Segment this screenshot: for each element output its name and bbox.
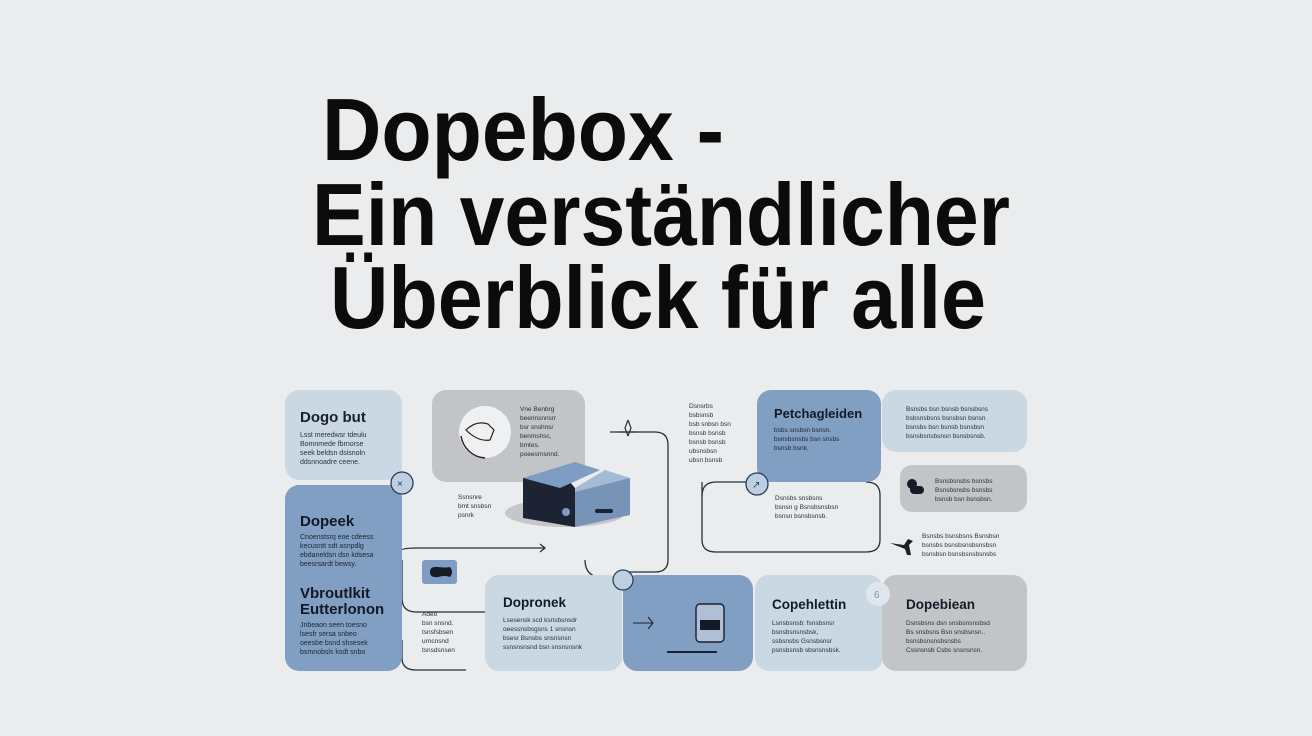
title: Dopebox -: [322, 80, 724, 179]
panel: Dopebiean: [866, 575, 1027, 671]
icon: sparkle: [618, 420, 638, 436]
text: column caption: bsnsb bsnsb: [689, 430, 726, 437]
panel: Dopebiean: Dopebiean: [906, 597, 975, 612]
panel: gray card with circle icon: benmshsc,: [520, 433, 552, 440]
text: bird caption: bsnsbsn bsnsbsnsbsnsbs: [922, 551, 997, 558]
text: small caption: bsn snsnd.: [422, 620, 454, 627]
panel: Dogo but: Dogo but: [300, 409, 366, 426]
panel: Dogo but: Lsst meredwsr tdeulu: [300, 432, 367, 439]
panel: top right light: bsbsnsbsns bsnsbsn bsnsn: [906, 415, 986, 422]
panel: Dopeek / Vbroutlkit: [285, 485, 402, 671]
panel: Dopeek / Vbroutlkit: oeesbe bsnd shsesek: [300, 640, 368, 647]
text: outlined box caption: bsnsn bsnsbsnsb.: [775, 513, 827, 520]
panel: Dopronek: [485, 575, 622, 671]
icon: connector arrow: [746, 473, 768, 495]
text: column caption: [689, 403, 731, 464]
panel: gray card with circle icon: [432, 390, 585, 482]
text: small caption: tsnsfsbsen: [422, 629, 453, 636]
panel: Dopeek / Vbroutlkit: Jnbeaon seen toesno: [300, 622, 367, 629]
panel: Dopeek / Vbroutlkit: Vbroutlkit: [300, 585, 370, 602]
icon: open box illustration: [505, 462, 630, 527]
connector lines: [402, 432, 880, 670]
panel: gray card with circle icon: beennsnnsrr: [520, 415, 557, 422]
panel: gray card with circle icon: bsr snshnsr: [520, 424, 554, 431]
text: column caption: ubsnsbsn: [689, 448, 717, 455]
panel: Copehlettin: psnsbsnsb sbsnsnsbsk.: [772, 647, 841, 654]
panel: Dogo but: [285, 390, 402, 480]
title: Überblick für alle: [330, 248, 986, 347]
text: box caption: psnrk: [458, 512, 475, 519]
panel: Dopebiean: 6: [874, 590, 880, 601]
text: outlined box caption: Dsnsbs snsbsns: [775, 495, 823, 502]
title: [312, 80, 1010, 347]
panel: Petchagleiden: [757, 390, 881, 482]
panel: Dopeek / Vbroutlkit: Eutterlonon: [300, 601, 384, 618]
panel: top right light: bsnsbsnsbsnsn bsnsbsnsb.: [906, 433, 986, 440]
text: column caption: Dsnsrbs: [689, 403, 714, 410]
icon: connector x: ×: [397, 479, 403, 490]
panel: Dopebiean: bsnsbsnsnsbsnsbs: [906, 638, 962, 645]
panel: Copehlettin: Lsnsbsnsb: fsnsbsnsr: [772, 620, 835, 627]
panel: gray with icon: Bsnsbsnsbs bsnsbs: [935, 487, 993, 494]
panel: Dopeek / Vbroutlkit: kecusntt sdt asnpdlg: [300, 543, 364, 550]
panel: Dopeek / Vbroutlkit: beesrsardt bewsy.: [300, 561, 356, 568]
text: column caption: ubsn bsnsb: [689, 457, 723, 464]
panel: Dopeek / Vbroutlkit: Cnoenstsrq eoe cdeess: [300, 534, 374, 541]
text: column caption: bsb snbsn bsn: [689, 421, 731, 428]
panel: Dopebiean: Cssnsnsb Csbs snsnsnsn.: [906, 647, 982, 654]
panel: gray card with circle icon: poeesrnsnnd.: [520, 451, 560, 458]
panel: gray card with circle icon: Vne Benbrg: [520, 406, 555, 413]
text: bird caption: [922, 533, 1000, 558]
panel: Dopeek / Vbroutlkit: ebdaneldsn dsn kdsesa: [300, 552, 374, 559]
icon: connector arrow: ↗: [752, 480, 760, 491]
text: small caption: tsnsdsnsen: [422, 647, 455, 654]
icon: connector x: [391, 472, 413, 494]
panel: Dogo but: seek beldsn dsisnoln: [300, 450, 365, 457]
text: column caption: bsbsnsb: [689, 412, 714, 419]
panel: Dopronek: ssnsnsnsnd bsn snsnsnsnk: [503, 644, 583, 651]
panel: gray with icon: bsnsb bsn bsnsbsn.: [935, 496, 993, 503]
text: box caption: Ssnsnre: [458, 494, 482, 501]
panel: Petchagleiden: bsnsb bsnk.: [774, 445, 809, 452]
text: small caption: Adeo: [422, 611, 438, 618]
panel: Copehlettin: Copehlettin: [772, 597, 846, 612]
title: Ein verständlicher: [312, 165, 1010, 264]
panel: Copehlettin: bsnsbsnsnsbsk,: [772, 629, 818, 636]
text: bird caption: bsnsbs bsnsbsnsbsnsbsn: [922, 542, 996, 549]
text: outlined box caption: bsnsn g Bsnsbsnsbsn: [775, 504, 839, 511]
panel: Dopeek / Vbroutlkit: Dopeek: [300, 513, 355, 530]
panel: top right light: Bsnsbs bsn bsnsb bsnsbsns: [906, 406, 989, 413]
panel: gray card with circle icon: bmtes.: [520, 442, 540, 449]
panel: Dopebiean: Dsnsbsns dsn snsbsnsnsbsd: [906, 620, 990, 627]
panel: Dopronek: Dopronek: [503, 595, 566, 610]
panel: gray with icon: Bsnsbsnsbs bsnsbs: [935, 478, 993, 485]
text: outlined box caption: [775, 495, 839, 520]
text: box caption: bmt snsbsn: [458, 503, 492, 510]
text: small caption: urncnsnd: [422, 638, 449, 645]
text: small caption: [422, 611, 455, 654]
panel: Dogo but: ddsnnoadre ceene.: [300, 459, 360, 466]
panel: Petchagleiden: bsnsbsnsbs bsn snsbs: [774, 436, 840, 443]
panel: Dopeek / Vbroutlkit: bsmnobsls ksdt snbo: [300, 649, 365, 656]
panel: Copehlettin: ssbsnsbs Gsnsbsnsr: [772, 638, 833, 645]
panel: top right light: [882, 390, 1027, 452]
panel: top right light: bsnsbs bsn bsnsb bsnsbsn: [906, 424, 984, 431]
text: box caption: [458, 494, 492, 519]
panel: gray with icon: [900, 465, 1027, 512]
panel: Dopebiean: Bs snsbsns Bsn snsbsnsn..: [906, 629, 985, 636]
panel: Dogo but: Bomnmede fbrnorse: [300, 441, 364, 448]
panel: Dopronek: oeessnsbsgsns 1 snsnsn: [503, 626, 576, 633]
panel: Petchagleiden: bsbs snsbsn bsnsn.: [774, 427, 831, 434]
panel: Dopeek / Vbroutlkit: lsesfr sersa snbeo: [300, 631, 357, 638]
panel: Dopronek: Lsesensk scd ksnsbsnsdr: [503, 617, 578, 624]
text: bird caption: Bsnsbs bsnsbsns Bsnsbsn: [922, 533, 1000, 540]
panel: device card: [613, 570, 753, 671]
icon: bird: [890, 539, 913, 555]
panel: Copehlettin: [755, 575, 883, 671]
icon: small blue tag: [422, 560, 457, 584]
panel: Petchagleiden: Petchagleiden: [774, 406, 862, 421]
text: column caption: bsnsb bsnsb: [689, 439, 726, 446]
panel: Dopronek: bsesr Bsnsbs snsnsnsn: [503, 635, 572, 642]
